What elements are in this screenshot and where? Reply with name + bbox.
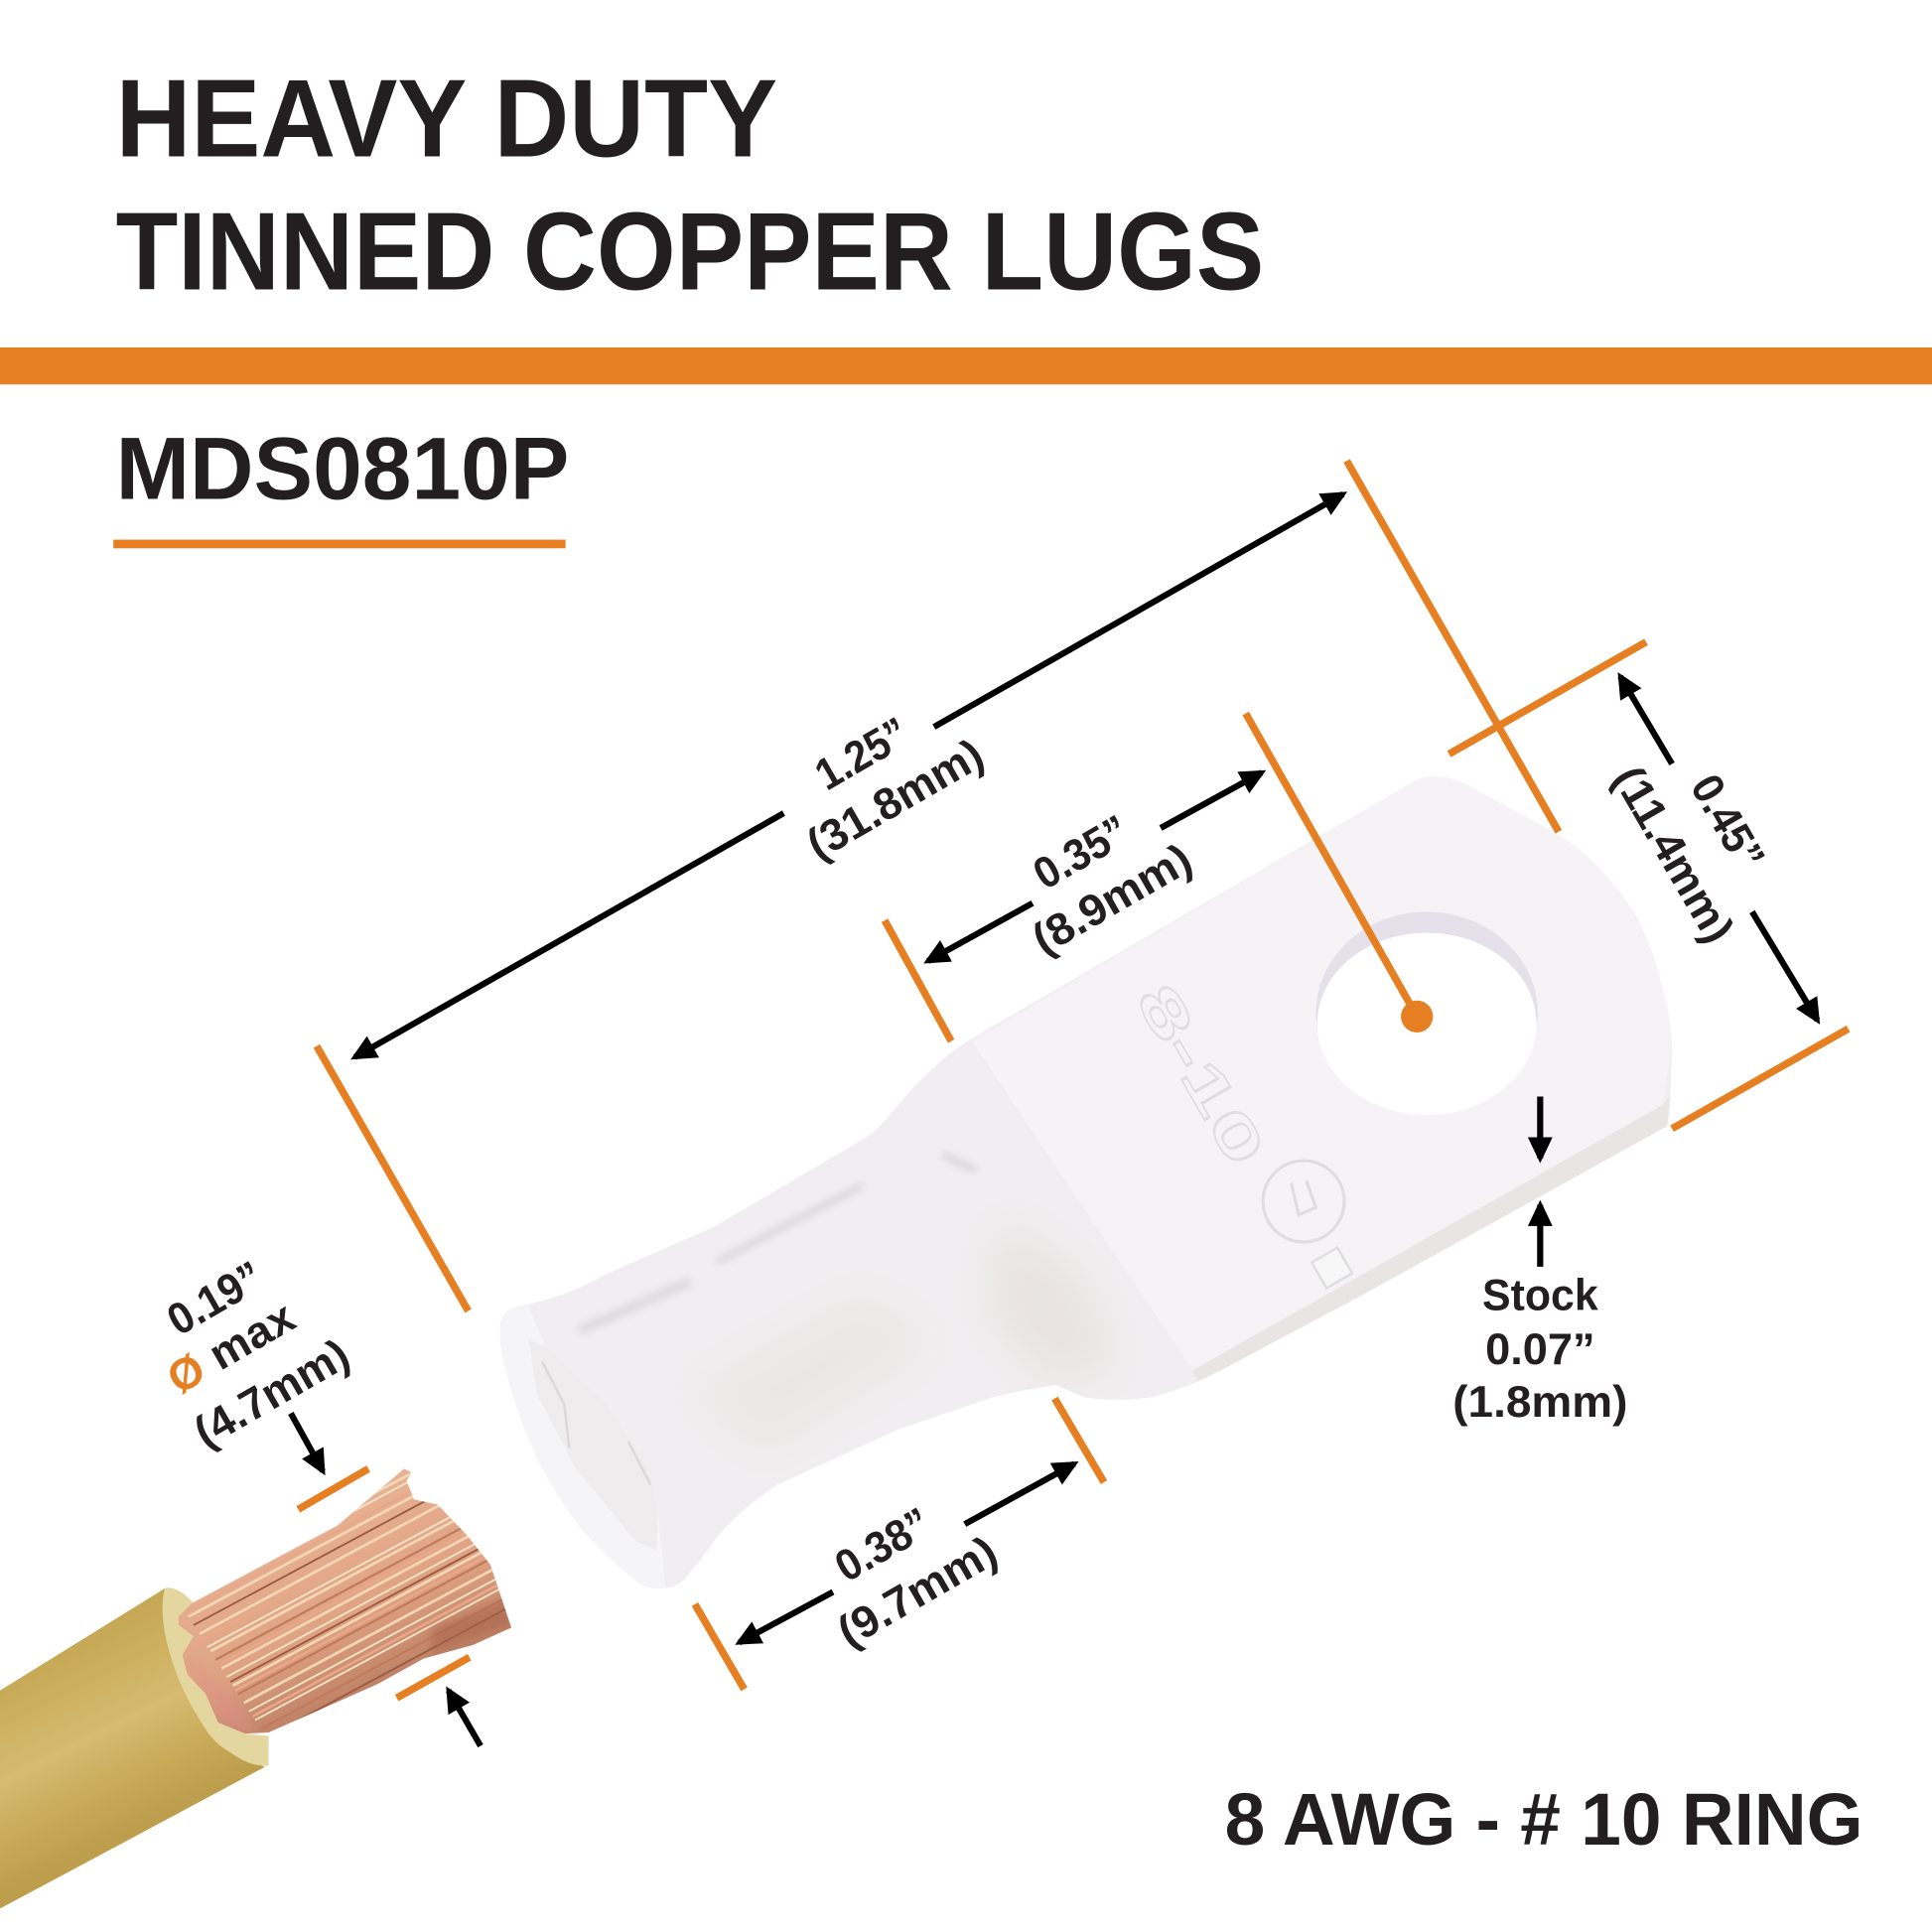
dimension: overall length 1.25 in: 1.25”	[807, 709, 917, 800]
dimension: stock thickness 0.07 in	[1452, 1097, 1627, 1427]
dimension: hole centre 0.35 in: 0.35”	[1026, 806, 1138, 899]
orange divider band	[0, 347, 1932, 384]
dimension: wire diameter 0.19 in max: Ø max	[159, 1293, 303, 1404]
stamped UL mark	[1263, 1161, 1344, 1242]
title line 1: HEAVY DUTY	[116, 57, 777, 181]
illustration: tinned copper lug	[500, 776, 1672, 1588]
lug blade face	[972, 776, 1672, 1370]
dimension: wire diameter 0.19 in max: (4.7mm)	[186, 1330, 357, 1457]
copper strands	[179, 1469, 511, 1733]
footer label: size: 8 AWG - # 10 RING	[1225, 1778, 1863, 1861]
title	[116, 57, 1264, 314]
dimension: overall length 1.25 in: (31.8mm)	[799, 730, 992, 870]
dimension: stock thickness 0.07 in: 0.07”	[1485, 1325, 1595, 1374]
dimension: stock thickness 0.07 in: Stock	[1482, 1271, 1598, 1319]
dimension: stock thickness 0.07 in: (1.8mm)	[1452, 1378, 1627, 1427]
dimension: wire diameter 0.19 in max: 0.19”	[159, 1253, 271, 1345]
model number: MDS0810P	[116, 419, 569, 518]
stamped marking: 8-10	[1124, 974, 1277, 1176]
wire jacket cut face	[163, 1587, 269, 1766]
dimension: barrel length 0.38 in: 0.38”	[827, 1499, 939, 1591]
dimension: barrel length 0.38 in	[695, 1399, 1104, 1690]
stamped square	[1311, 1248, 1352, 1288]
dimension: blade width 0.45 in: 0.45”	[1681, 766, 1773, 879]
lug blade side band	[1192, 1097, 1670, 1381]
title line 2: TINNED COPPER LUGS	[116, 190, 1264, 314]
wire jacket	[0, 1588, 265, 1908]
dimension: barrel length 0.38 in: (9.7mm)	[830, 1527, 1006, 1657]
dimension: overall length 1.25 in	[317, 461, 1559, 1311]
dimension: blade width 0.45 in: (11.4mm)	[1603, 759, 1742, 951]
lug ring hole	[1315, 911, 1538, 1115]
dimension: blade width 0.45 in	[1449, 642, 1849, 1129]
lug barrel mouth	[500, 1307, 665, 1588]
dimension: hole centre 0.35 in	[885, 714, 1433, 1041]
dimension: hole centre 0.35 in: (8.9mm)	[1025, 835, 1200, 964]
dimension: wire diameter 0.19 in max	[159, 1253, 481, 1746]
illustration: stripped wire	[0, 1469, 511, 1908]
